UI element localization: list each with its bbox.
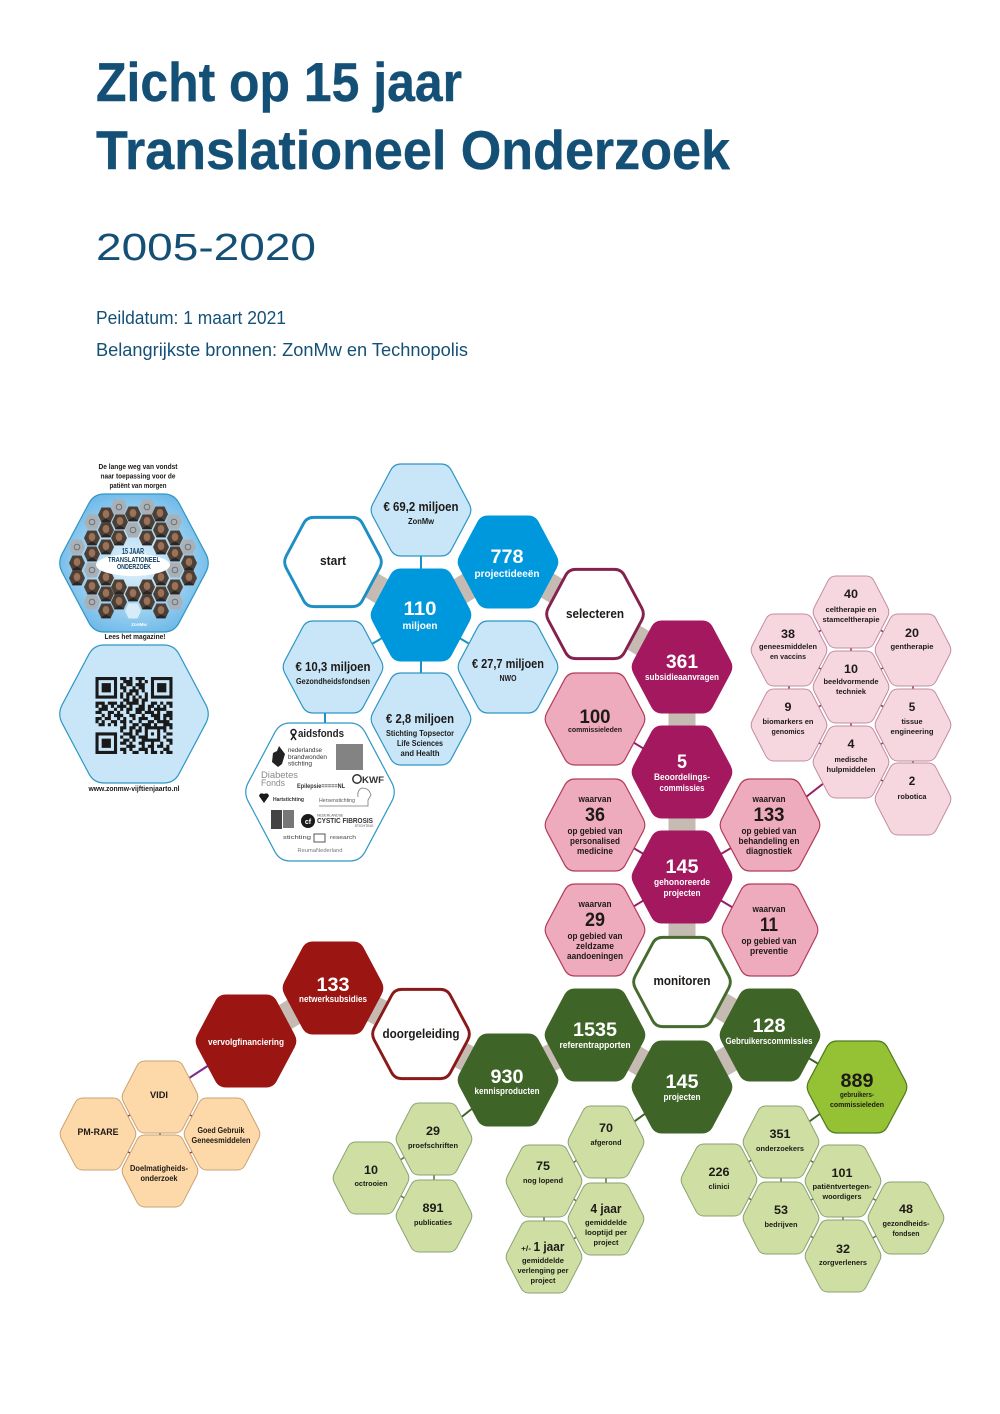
hexagon: 36 personalised medicine: medicine: [577, 846, 613, 856]
hexagon: 5 tissue engineering: 5: [909, 700, 916, 714]
hexagon: 10 beeldvormende techniek: [813, 651, 889, 723]
hexagon: VIDI: VIDI: [150, 1090, 168, 1100]
hexagon: 20 gentherapie: 20: [905, 626, 919, 640]
hexagon: 36 personalised medicine: personalised: [570, 836, 620, 846]
logo: Cystic Fibrosis: CYSTIC FIBROSIS: [317, 816, 373, 825]
hexagon: 145 gehonoreerde projecten: projecten: [664, 888, 700, 898]
hexagon: 38 geneesmiddelen: en vaccins: [770, 652, 806, 661]
hexagon: Doelmatigheidsonderzoek: [122, 1135, 198, 1207]
hexagon: 101 patientvertegenwoordigers: woordigers: [822, 1192, 862, 1201]
hexagon: 36 personalised medicine: waarvan: [578, 794, 612, 804]
hexagon: 29 zeldzame aandoeningen: waarvan: [578, 899, 612, 909]
hexagon: 32 zorgverleners: 32: [836, 1242, 850, 1256]
hexagon: 361 subsidieaanvragen: 361: [666, 652, 698, 673]
hexagon: 9 biomarkers: biomarkers en: [762, 717, 814, 726]
hexagon: Topsector funding: [371, 673, 471, 765]
hexagon: 5 Beoordelingscommissies: 5: [677, 752, 687, 773]
text block: reference date and sources: Peildatum: 1 maart 2021: [96, 308, 286, 328]
hexagon: 1 jaar verlenging: gemiddelde: [522, 1256, 564, 1265]
hexagon: 1 jaar verlenging: 1 jaar: [534, 1239, 564, 1254]
hexagon: 11 preventie: 11: [760, 915, 778, 936]
hexagon: 133 behandeling en diagnostiek: waarvan: [752, 794, 786, 804]
logo: Cystic Fibrosis: NEDERLANDSE: [317, 814, 344, 818]
panel: magazine cover hexagon: [60, 494, 208, 632]
hexagon: 889 gebruikerscommissieleden: gebruikers-: [840, 1090, 874, 1099]
hexagon: 2 robotica: robotica: [898, 792, 927, 801]
logo: Cystic Fibrosis: cf: [305, 819, 312, 826]
hexagon: 10 octrooien: 10: [364, 1163, 378, 1177]
caption: read the magazine: Lees het magazine!: [104, 632, 166, 641]
logo: brandwonden stichting: [272, 746, 327, 768]
hexagon: selecteren: [547, 569, 643, 659]
hexagon: PM-RARE: [60, 1098, 136, 1170]
hexagon: 48 gezondheidsfondsen: 48: [899, 1202, 913, 1216]
hexagon: 101 patientvertegenwoordigers: patiëntvertegen-: [812, 1182, 872, 1191]
hexagon: 128 Gebruikerscommissies: Gebruikerscommissies: [726, 1036, 812, 1046]
hexagon: 891 publicaties: [396, 1180, 472, 1252]
hexagon: 4 jaar looptijd: gemiddelde: [585, 1218, 627, 1227]
hexagon: 778 projectideeen: [458, 516, 558, 608]
hexagon: 133 behandeling en diagnostiek: behandeling en: [738, 836, 800, 846]
hexagon: vervolgfinanciering: vervolgfinanciering: [208, 1037, 284, 1047]
panel: magazine cover hexagon: ZonMw: [131, 622, 147, 627]
hexagon: 100 commissieleden: commissieleden: [568, 725, 622, 734]
hexagon: 5 Beoordelingscommissies: Beoordelings-: [654, 772, 710, 782]
hexagon: 145 gehonoreerde projecten: [632, 831, 732, 923]
hexagon: 930 kennisproducten: kennisproducten: [474, 1086, 540, 1096]
hexagon: 5 Beoordelingscommissies: [632, 726, 732, 818]
panel: magazine cover hexagon: 15 JAAR: [122, 547, 144, 556]
hexagon: 128 Gebruikerscommissies: 128: [752, 1016, 786, 1037]
hexagon: 48 gezondheidsfondsen: fondsen: [892, 1229, 920, 1238]
hexagon: 11 preventie: waarvan: [752, 904, 786, 914]
caption: website url: www.zonmw-vijftienjaarto.nl: [88, 784, 180, 793]
hexagon: 889 gebruikerscommissieleden: 889: [840, 1071, 874, 1092]
hexagon: 1 jaar verlenging: verlenging per: [518, 1266, 569, 1275]
hexagon: 4 jaar looptijd: project: [594, 1238, 619, 1247]
hexagon: 145 projecten: 145: [666, 1072, 699, 1093]
hexagon: 133 netwerksubsidies: netwerksubsidies: [299, 994, 367, 1004]
hexagon: 53 bedrijven: [743, 1182, 819, 1254]
hexagon: 36 personalised medicine: 36: [585, 805, 605, 826]
hexagon: Goed Gebruik Geneesmiddelen: Goed Gebruik: [198, 1126, 245, 1135]
hexagon: 32 zorgverleners: zorgverleners: [819, 1258, 867, 1267]
title: Zicht op 15 jaar: [96, 51, 462, 113]
hexagon: 1535 referentrapporten: 1535: [573, 1020, 617, 1041]
hexagon: 133 behandeling en diagnostiek: diagnostiek: [746, 846, 793, 856]
hexagon: monitoren: [634, 937, 730, 1027]
hexagon: 5 tissue engineering: engineering: [890, 727, 934, 736]
hexagon: NWO funding: [458, 621, 558, 713]
hexagon: 100 commissieleden: [545, 673, 645, 765]
hexagon: 101 patientvertegenwoordigers: 101: [832, 1166, 853, 1180]
hexagon: 5 tissue engineering: tissue: [902, 717, 922, 726]
hexagon: 29 zeldzame aandoeningen: aandoeningen: [567, 951, 623, 961]
hexagon: 29 proefschriften: [396, 1103, 472, 1175]
text block: reference date and sources: [96, 308, 468, 360]
hexagon: 145 gehonoreerde projecten: gehonoreerde: [654, 877, 710, 887]
hexagon: 930 kennisproducten: [458, 1034, 558, 1126]
hexagon: 11 preventie: op gebied van: [742, 936, 796, 946]
panel: health funds logos hexagon: [246, 723, 394, 861]
hexagon: 2 robotica: 2: [909, 774, 916, 788]
hexagon: 4 medische hulpmiddelen: [813, 726, 889, 798]
logo: stichting research: [283, 834, 356, 842]
hexagon: 226 clinici: [681, 1144, 757, 1216]
hexagon: ZonMw funding: [371, 464, 471, 556]
hexagon: 48 gezondheidsfondsen: gezondheids-: [882, 1219, 930, 1228]
logo: Diabetes Fonds: Diabetes: [261, 770, 298, 781]
hexagon: 32 zorgverleners: [805, 1220, 881, 1292]
hexagon: 1535 referentrapporten: [545, 989, 645, 1081]
hexagon: 110 miljoen: miljoen: [402, 620, 438, 632]
hexagon: 110 miljoen: 110: [404, 599, 436, 620]
hexagon: 40 celtherapie: celtherapie en: [826, 605, 877, 614]
caption: magazine intro: [98, 462, 178, 490]
hexagon: 38 geneesmiddelen: geneesmiddelen: [759, 642, 817, 651]
logo: brandwonden stichting: nederlandse: [288, 748, 323, 754]
subtitle: period: 2005-2020: [96, 227, 316, 269]
logo: KWF: [353, 775, 384, 786]
hexagon: NWO funding: NWO: [500, 674, 516, 683]
hexagon: 20 gentherapie: gentherapie: [890, 642, 934, 651]
hexagon: 29 proefschriften: proefschriften: [408, 1141, 458, 1150]
caption: magazine intro: naar toepassing voor de: [100, 472, 176, 480]
logo: grey square: [336, 744, 363, 770]
hexagon: VIDI: [122, 1061, 198, 1133]
logo: Cystic Fibrosis: STICHTING: [355, 824, 374, 828]
hexagon: ZonMw funding: ZonMw: [408, 517, 435, 526]
hexagon: monitoren: monitoren: [654, 973, 711, 988]
hexagon: 891 publicaties: 891: [422, 1201, 444, 1215]
title: [96, 51, 730, 181]
logo: aidsfonds: aidsfonds: [298, 728, 344, 740]
hexagon: 145 gehonoreerde projecten: 145: [666, 857, 699, 878]
hexagon: Doelmatigheidsonderzoek: Doelmatigheids-: [130, 1164, 188, 1173]
hexagon: 361 subsidieaanvragen: subsidieaanvragen: [645, 672, 719, 682]
hexagon: 29 zeldzame aandoeningen: 29: [585, 910, 605, 931]
hexagon: NWO funding: € 27,7 miljoen: [472, 657, 544, 671]
hexagon: 29 zeldzame aandoeningen: op gebied van: [568, 931, 622, 941]
hexagon: 101 patientvertegenwoordigers: [805, 1145, 881, 1217]
hexagon: 4 jaar looptijd: [568, 1183, 644, 1255]
hexagon: 1 jaar verlenging: [506, 1221, 582, 1293]
logo: Diabetes Fonds: [261, 770, 298, 789]
logo: Hersenstichting: [319, 788, 371, 806]
panel: magazine cover hexagon: ONDERZOEK: [117, 564, 151, 571]
hexagon: 889 gebruikerscommissieleden: commissieleden: [830, 1100, 884, 1109]
logo: KWF: KWF: [362, 775, 384, 786]
text block: reference date and sources: Belangrijkste bronnen: ZonMw en Technopolis: [96, 340, 468, 360]
logo: grey book: [271, 810, 294, 829]
hexagon: 133 behandeling en diagnostiek: [720, 779, 820, 871]
hexagon: 11 preventie: preventie: [750, 946, 788, 956]
hexagon: 1 jaar verlenging: project: [530, 1276, 556, 1285]
hexagon: Topsector funding: and Health: [400, 749, 440, 758]
hexagon: 351 onderzoekers: [743, 1106, 819, 1178]
hexagon: 38 geneesmiddelen: 38: [781, 627, 795, 641]
hexagon: Goed Gebruik Geneesmiddelen: Geneesmiddelen: [192, 1136, 251, 1145]
hexagon: 36 personalised medicine: op gebied van: [568, 826, 622, 836]
hexagon: vervolgfinanciering: [196, 995, 296, 1087]
connectors: thick process bars: [246, 562, 770, 1087]
hexagon: 226 clinici: clinici: [708, 1182, 730, 1191]
hexagon: 29 zeldzame aandoeningen: [545, 884, 645, 976]
hexagon: doorgeleiding: doorgeleiding: [382, 1026, 460, 1041]
hexagon: 145 projecten: projecten: [664, 1092, 700, 1102]
hexagon: 778 projectideeen: 778: [490, 547, 524, 568]
hexagon: 930 kennisproducten: 930: [490, 1067, 524, 1088]
hexagon: 40 celtherapie: 40: [844, 587, 858, 601]
hexagon: 5 Beoordelingscommissies: commissies: [660, 783, 704, 793]
hexagon: 9 biomarkers: genomics: [772, 727, 804, 736]
hexagon: ZonMw funding: € 69,2 miljoen: [384, 500, 458, 514]
title: Translationeel Onderzoek: [96, 119, 730, 181]
hexagon: 100 commissieleden: 100: [580, 707, 610, 728]
logo: brandwonden stichting: brandwonden: [288, 755, 327, 761]
hexagon: 36 personalised medicine: [545, 779, 645, 871]
hexagon: doorgeleiding: [373, 989, 469, 1079]
hexagon: Gezondheidsfondsen funding: [283, 621, 383, 713]
hexagon: 10 octrooien: octrooien: [354, 1179, 388, 1188]
hexagon: 1 jaar verlenging: +/-: [521, 1244, 532, 1253]
hexagon: selecteren: selecteren: [566, 606, 624, 621]
hexagon: 4 jaar looptijd: looptijd per: [585, 1228, 627, 1237]
logo: Diabetes Fonds: Fonds: [261, 778, 285, 789]
hexagon: 145 projecten: [632, 1041, 732, 1133]
hexagon: 70 afgerond: [568, 1106, 644, 1178]
hexagon: 133 netwerksubsidies: [283, 942, 383, 1034]
hexagon: 9 biomarkers: [751, 689, 827, 761]
hexagon: 29 zeldzame aandoeningen: zeldzame: [576, 941, 614, 951]
logo: Cystic Fibrosis: [301, 814, 374, 828]
hexagon: 10 beeldvormende techniek: beeldvormende: [824, 677, 878, 686]
hexagon: 889 gebruikerscommissieleden: [807, 1041, 907, 1133]
hexagon: Gezondheidsfondsen funding: € 10,3 miljoen: [296, 660, 370, 674]
panel: QR code hexagon: [60, 645, 208, 783]
logo: stichting research: stichting: [283, 835, 311, 841]
hexagon: 4 jaar looptijd: 4 jaar: [590, 1201, 622, 1216]
caption: magazine intro: De lange weg van vondst: [98, 462, 178, 471]
hexagon: 10 octrooien: [333, 1142, 409, 1214]
hexagon: Gezondheidsfondsen funding: Gezondheidsfondsen: [296, 677, 370, 686]
hexagon: Topsector funding: Stichting Topsector: [386, 729, 454, 738]
hexagon: 10 beeldvormende techniek: 10: [844, 662, 858, 676]
hexagon: start: start: [320, 554, 347, 568]
logo: EpilepsieNL: Epilepsie=====NL: [297, 783, 345, 790]
logo: Hersenstichting: Hersenstichting: [319, 798, 355, 804]
hexagon: 70 afgerond: 70: [599, 1121, 613, 1135]
hexagon: 40 celtherapie: stamceltherapie: [822, 615, 880, 624]
hexagon: 133 behandeling en diagnostiek: op gebied van: [742, 826, 796, 836]
hexagon: Doelmatigheidsonderzoek: onderzoek: [140, 1174, 178, 1183]
hexagon: 11 preventie: [722, 884, 818, 976]
hexagon: 4 medische hulpmiddelen: medische: [834, 755, 868, 764]
logo: ReumaNederland: ReumaNederland: [298, 848, 342, 854]
hexagon: 2 robotica: [875, 763, 951, 835]
hexagon: 75 nog lopend: [506, 1145, 582, 1217]
hexagon: 4 medische hulpmiddelen: hulpmiddelen: [826, 765, 876, 774]
hexagon: 128 Gebruikerscommissies: [720, 989, 820, 1081]
hexagon: 53 bedrijven: bedrijven: [764, 1220, 798, 1229]
hexagon: 48 gezondheidsfondsen: [868, 1182, 944, 1254]
hexagon: Topsector funding: Life Sciences: [397, 739, 443, 748]
hexagon: 40 celtherapie: [813, 576, 889, 648]
caption: magazine intro: patiënt van morgen: [110, 481, 167, 490]
hexagon: 133 behandeling en diagnostiek: 133: [754, 805, 784, 826]
logo: stichting research: research: [330, 835, 356, 841]
hexagon: 226 clinici: 226: [708, 1165, 730, 1179]
hexagon: 361 subsidieaanvragen: [632, 621, 732, 713]
hexagon: PM-RARE: PM-RARE: [78, 1127, 118, 1137]
hexagon: Goed Gebruik Geneesmiddelen: [184, 1098, 260, 1170]
hexagon: 5 tissue engineering: [875, 689, 951, 761]
hexagon: 110 miljoen: [371, 569, 471, 661]
hexagon: 891 publicaties: publicaties: [414, 1218, 452, 1227]
hexagon: 38 geneesmiddelen: [751, 614, 827, 686]
hexagon: 20 gentherapie: [875, 614, 951, 686]
hexagon: 778 projectideeen: projectideeën: [474, 568, 540, 580]
hexagon: Topsector funding: € 2,8 miljoen: [386, 712, 454, 726]
hexagon: 10 beeldvormende techniek: techniek: [836, 687, 867, 696]
hexagon: start: [285, 517, 381, 607]
hexagon: 351 onderzoekers: 351: [770, 1127, 791, 1141]
hexagon: 75 nog lopend: nog lopend: [523, 1176, 563, 1185]
hexagon: 133 netwerksubsidies: 133: [316, 975, 350, 996]
hexagon: 75 nog lopend: 75: [536, 1159, 550, 1173]
hexagon: 29 proefschriften: 29: [426, 1124, 440, 1138]
logo: Hartstichting: Hartstichting: [273, 797, 304, 803]
hexagon: 4 medische hulpmiddelen: 4: [848, 737, 855, 751]
hexagon: 70 afgerond: afgerond: [590, 1138, 622, 1147]
logo: brandwonden stichting: stichting: [288, 762, 312, 768]
panel: magazine cover hexagon: TRANSLATIONEEL: [108, 557, 161, 564]
hexagon: 1535 referentrapporten: referentrapporten: [560, 1040, 630, 1050]
hexagon: 9 biomarkers: 9: [784, 700, 792, 714]
logo: Hartstichting: [259, 793, 304, 803]
connectors: thin relation lines: [98, 510, 913, 1257]
hexagon: 53 bedrijven: 53: [774, 1203, 788, 1217]
hexagon: 351 onderzoekers: onderzoekers: [756, 1144, 804, 1153]
